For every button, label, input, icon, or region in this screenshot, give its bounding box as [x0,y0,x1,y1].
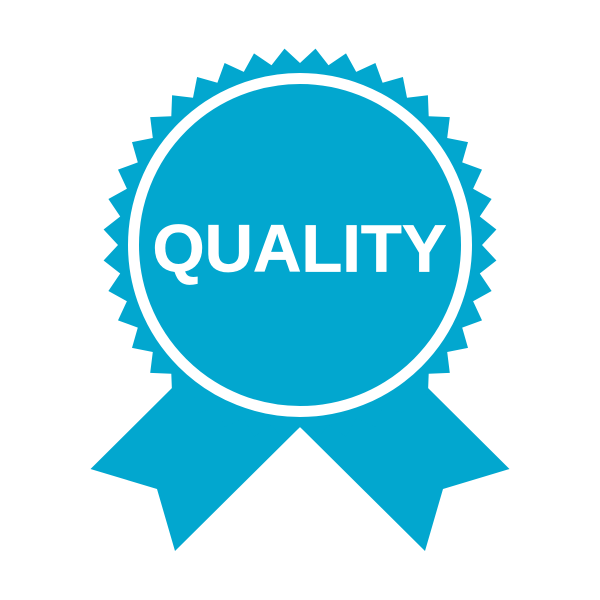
badge: quality rosette [90,49,510,551]
serrated seal edge [104,49,496,441]
white ring and centre disc [134,78,466,412]
label: QUALITY: QUALITY [152,212,447,287]
ribbon tails [90,370,510,551]
